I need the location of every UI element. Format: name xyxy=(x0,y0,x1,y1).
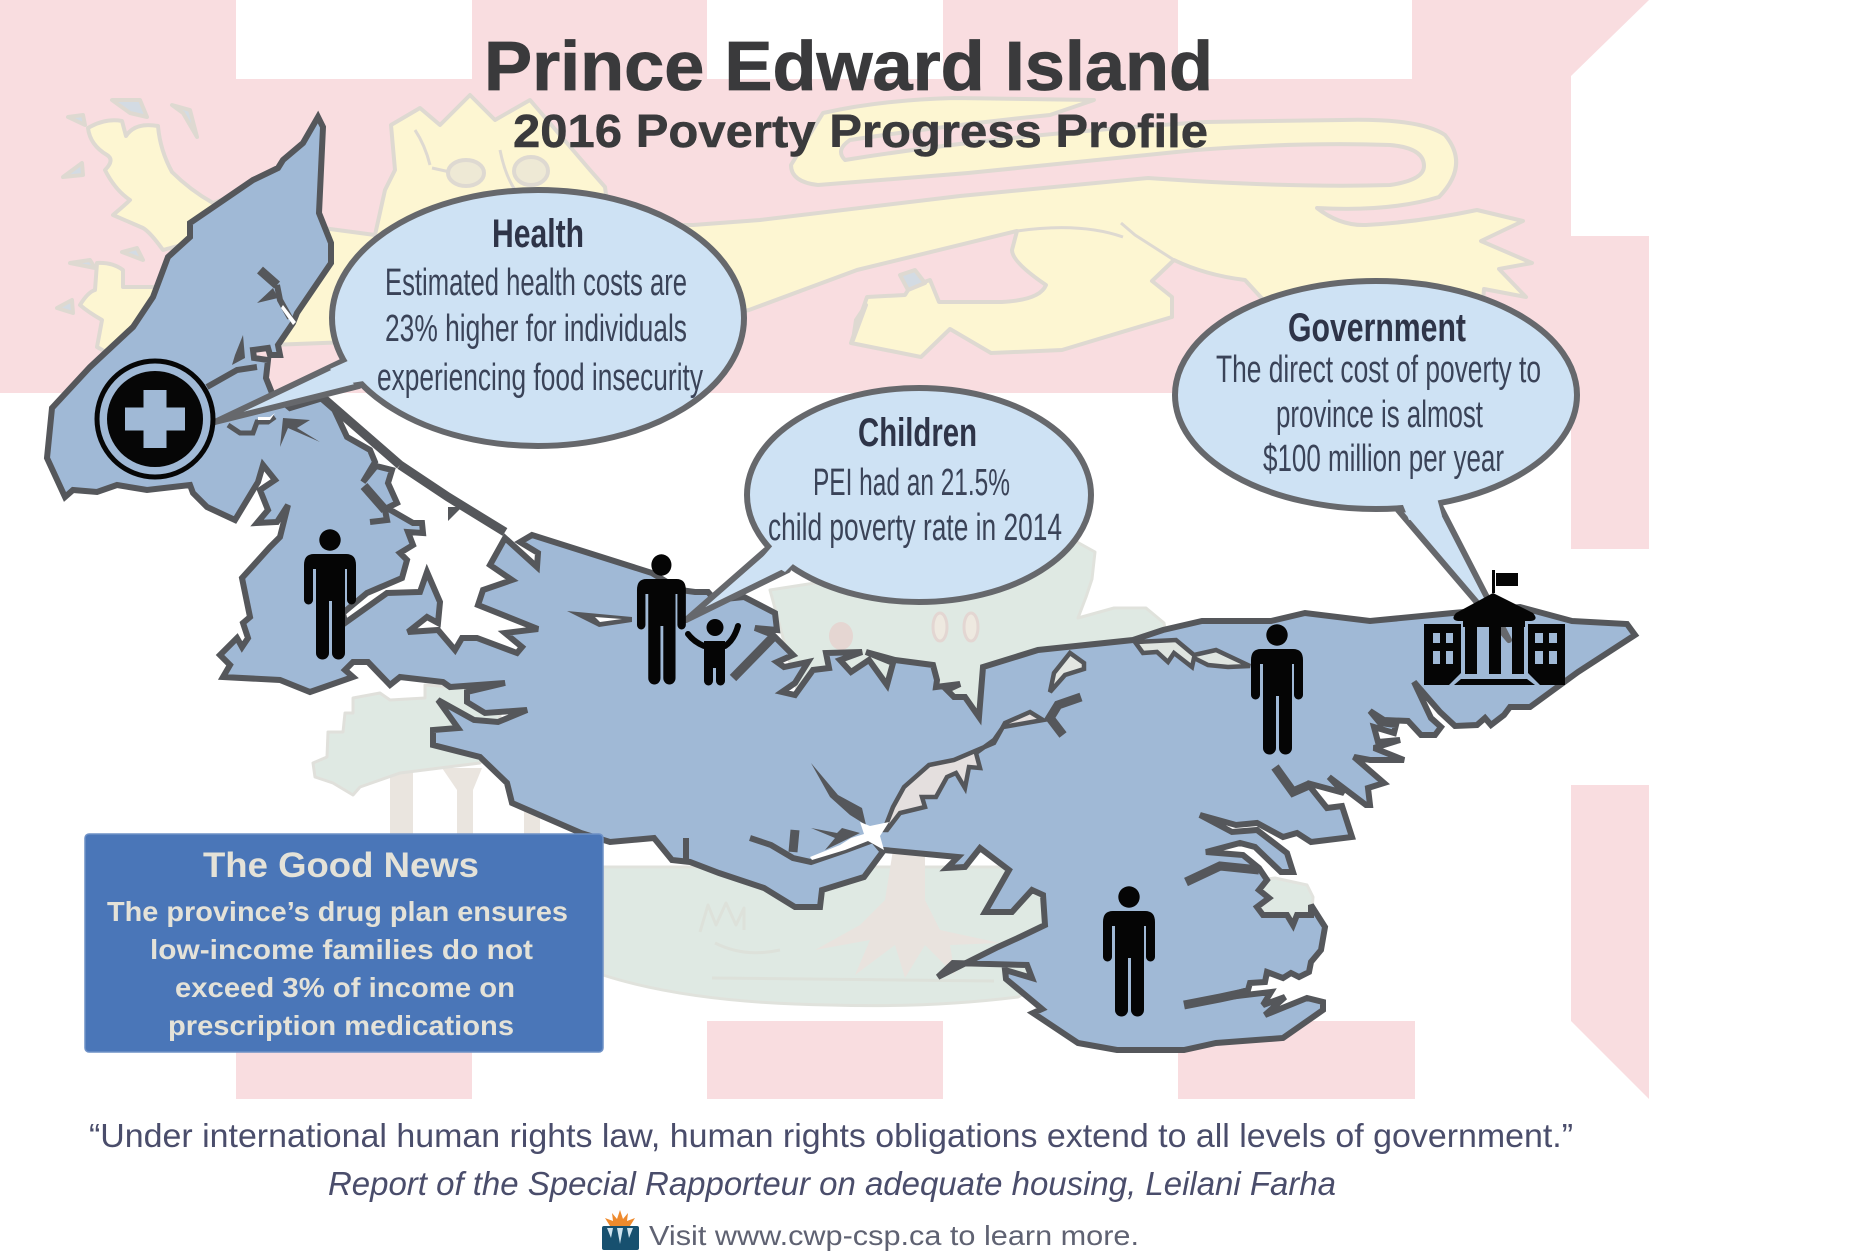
flag trees: green oak trees and ground faded behind the map xyxy=(313,542,1313,1006)
text: health cost statistic: experiencing food insecurity xyxy=(377,357,703,399)
text: drug plan description xyxy=(107,896,568,1041)
heading: The Good News: The Good News xyxy=(203,846,479,885)
icon: adult with child xyxy=(637,554,738,686)
map of Prince Edward Island xyxy=(47,117,1635,1050)
text: child poverty statistic: PEI had an 21.5% xyxy=(813,462,1010,504)
text: drug plan description: prescription medications xyxy=(168,1010,514,1041)
text: drug plan description: low-income families do not xyxy=(150,934,533,965)
icon: person on west of island xyxy=(304,529,356,660)
icon: government building with flag xyxy=(1424,570,1565,685)
title: Prince Edward Island xyxy=(484,27,1213,105)
text: government cost statistic: $100 million per year xyxy=(1263,438,1504,480)
text: child poverty statistic: child poverty rate in 2014 xyxy=(768,507,1062,549)
heading: Children: Children xyxy=(858,411,977,455)
quote attribution: Report of the Special Rapporteur on adequate housing, Leilani Farha xyxy=(328,1165,1336,1202)
footer link text: Visit www.cwp-csp.ca to learn more. xyxy=(649,1220,1139,1251)
icon: medical cross in circle xyxy=(97,361,213,477)
text: health cost statistic xyxy=(377,262,703,399)
text: government cost statistic xyxy=(1216,349,1541,480)
text: government cost statistic: The direct cost of poverty to xyxy=(1216,349,1541,391)
heading: Government: Government xyxy=(1288,306,1466,350)
text: drug plan description: exceed 3% of income on xyxy=(175,972,515,1003)
text: health cost statistic: 23% higher for individuals xyxy=(385,308,687,350)
island landmass xyxy=(47,117,1635,1050)
flag lion: gold lion faded behind the map xyxy=(57,90,1532,360)
callout: health speech bubble xyxy=(215,190,744,446)
text: government cost statistic: province is almost xyxy=(1276,394,1483,436)
icon: sunrise logo xyxy=(602,1210,639,1250)
icon: person in south of island xyxy=(1103,886,1155,1016)
text: health cost statistic: Estimated health costs are xyxy=(385,262,687,304)
text: drug plan description: The province’s drug plan ensures xyxy=(107,896,568,927)
river and inlet details on the coastline xyxy=(207,270,1309,1005)
icon: person in east of island xyxy=(1251,624,1303,754)
callout: children speech bubble xyxy=(686,388,1091,620)
panel: the good news xyxy=(85,834,603,1052)
subtitle: 2016 Poverty Progress Profile xyxy=(513,105,1208,157)
heading: Health: Health xyxy=(492,212,584,256)
callout: government speech bubble xyxy=(1175,281,1577,640)
quote: “Under international human rights law, human rights obligations extend to all levels of government.” xyxy=(89,1117,1573,1154)
background: pink flag field with crenellated border xyxy=(0,0,1649,1099)
text: child poverty statistic xyxy=(768,462,1062,549)
